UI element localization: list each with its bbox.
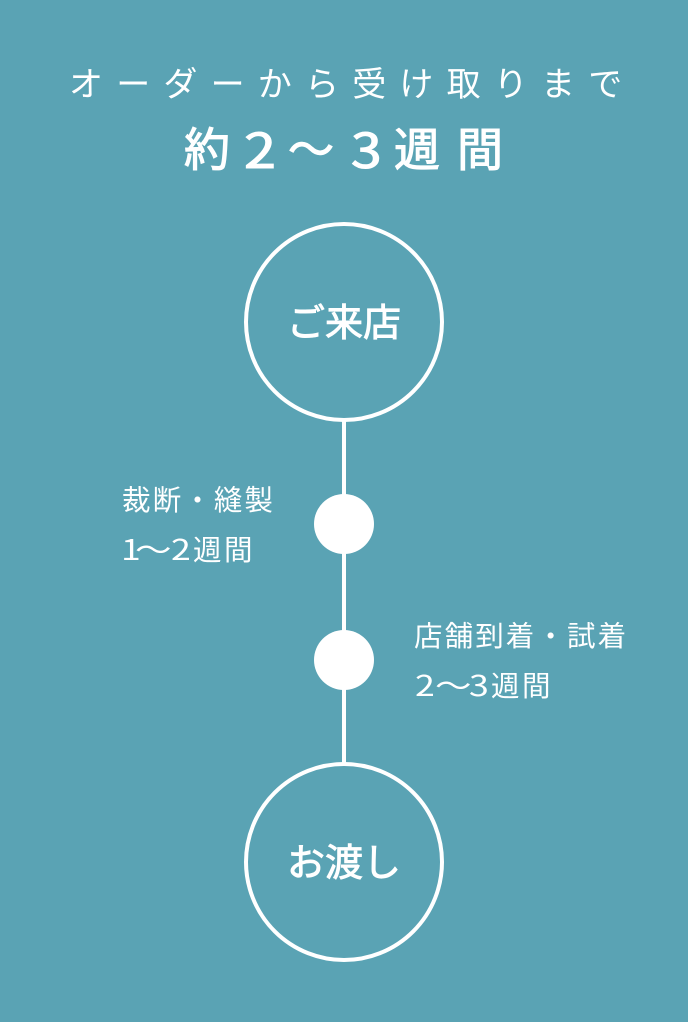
text: arrival duration: 間 — [522, 664, 551, 705]
dot: arrival step — [314, 630, 374, 690]
text: arrival duration: ～ — [435, 664, 472, 705]
text: sewing duration: 2 — [171, 528, 191, 569]
text: sewing step: 裁断・縫製 — [122, 478, 275, 519]
timeline connector line — [342, 420, 346, 764]
circle: handover — [244, 762, 444, 962]
text: sewing duration: 1 — [121, 528, 141, 569]
heading: duration: ～ — [288, 114, 334, 180]
heading: duration: 間 — [457, 114, 503, 180]
heading: duration: 週 — [394, 114, 440, 180]
text: arrival duration: 週 — [491, 664, 520, 705]
text: sewing duration: ～ — [135, 528, 172, 569]
circle: store visit — [244, 222, 444, 422]
label: store visit: ご来店 — [287, 292, 401, 347]
heading: duration: 2 — [244, 112, 276, 182]
text: arrival duration — [415, 664, 551, 705]
heading: duration: 約 — [184, 114, 230, 180]
heading: duration: 3 — [351, 112, 382, 182]
title: order to pickup: オーダーから受け取りまで — [69, 57, 635, 106]
text: sewing duration: 週 — [193, 528, 222, 569]
text: sewing duration — [121, 528, 253, 569]
dot: sewing step — [314, 494, 374, 554]
heading: duration — [184, 112, 503, 182]
text: arrival duration: 2 — [415, 664, 435, 705]
label: handover: お渡し — [287, 832, 401, 887]
text: arrival duration: 3 — [469, 664, 489, 705]
text: sewing duration: 間 — [224, 528, 253, 569]
text: arrival step: 店舗到着・試着 — [414, 614, 628, 655]
